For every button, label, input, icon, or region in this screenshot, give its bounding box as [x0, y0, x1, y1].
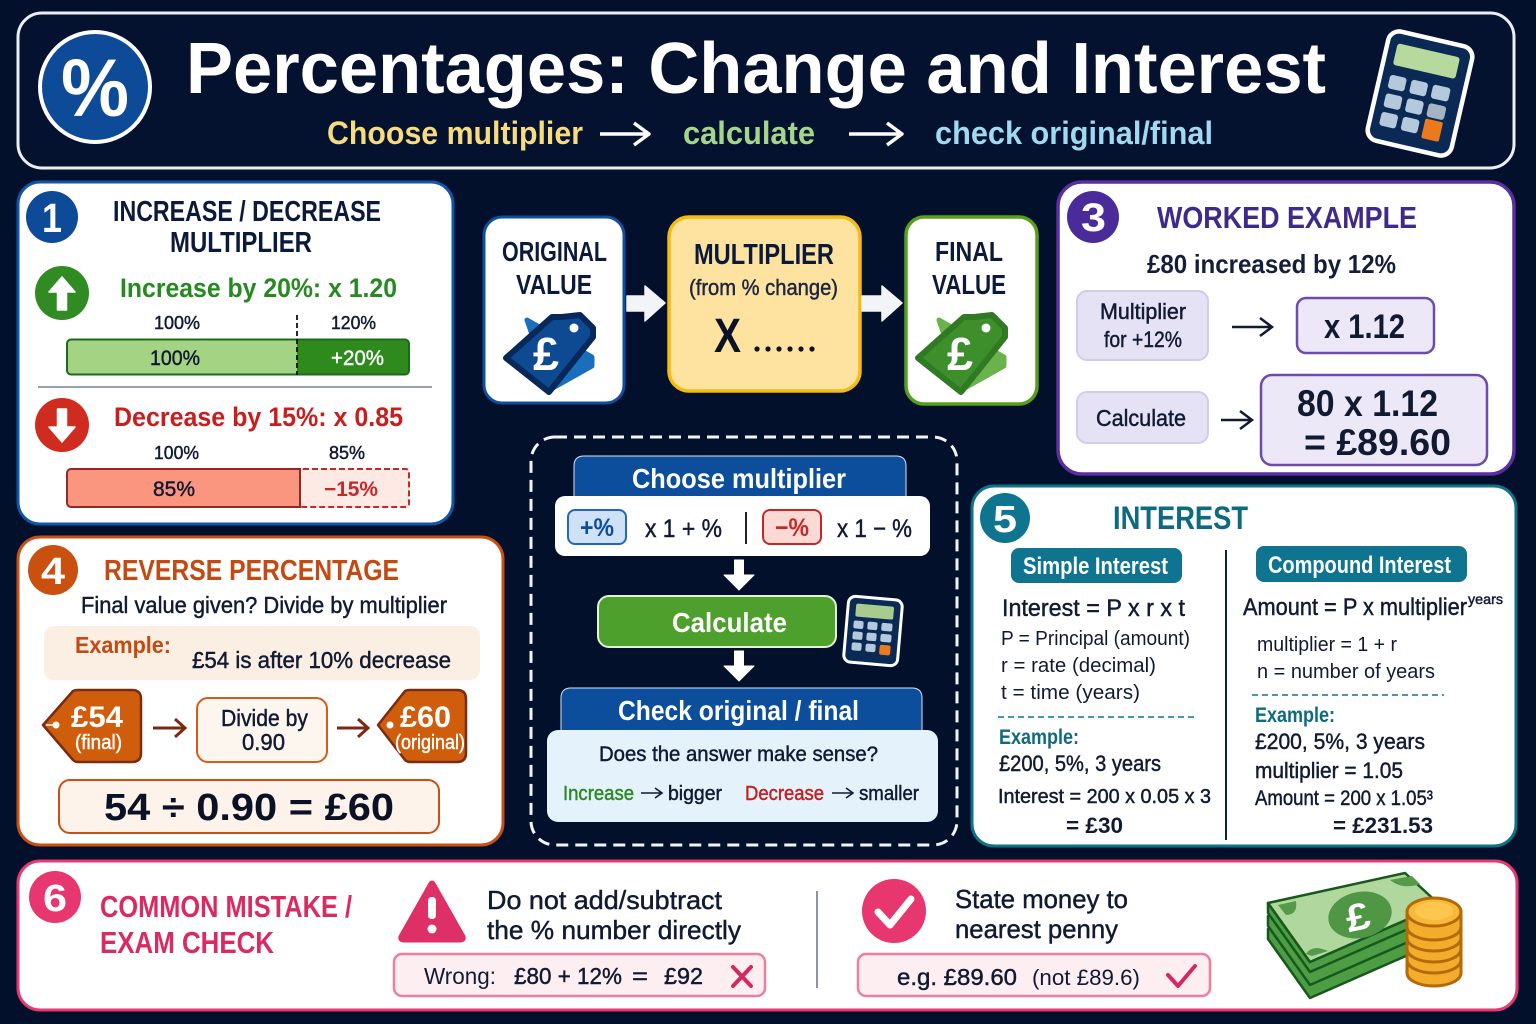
- subtitle flow: check original/final: [935, 115, 1213, 151]
- badge 6: 6: [43, 878, 67, 920]
- column: simple interest: Interest = P x r x t: [1002, 595, 1185, 622]
- column: compound interest: Example:: [1255, 704, 1335, 727]
- example callout: [44, 626, 480, 680]
- wrong example: [394, 954, 765, 996]
- flow box: multiplier: [669, 217, 860, 391]
- column: compound interest: = £231.53: [1333, 813, 1433, 838]
- icon: blue price tag: £: [533, 328, 559, 380]
- badge 1: [26, 191, 78, 243]
- icon: up arrow: [35, 266, 89, 320]
- badge 6: [29, 871, 81, 923]
- column: compound interest: years: [1468, 591, 1503, 607]
- exam check text: [955, 884, 1128, 944]
- correct example: [858, 954, 1210, 996]
- icon: green price tag: [918, 315, 1005, 392]
- step: multiplier label: Multiplier: [1100, 299, 1186, 324]
- step: calculate label: Calculate: [1096, 405, 1186, 431]
- problem statement: £80 increased by 12%: [1147, 249, 1396, 279]
- icon: down arrow: [35, 398, 89, 452]
- result: = £89.60: [1304, 422, 1451, 463]
- step header: check original / final: [561, 688, 922, 735]
- decrease bar chart: 100%: [154, 443, 199, 463]
- sense check box: Increase: [563, 783, 634, 805]
- wrong example: £92: [664, 963, 703, 989]
- column: compound interest: Amount = 200 x 1.05³: [1255, 787, 1433, 810]
- wrong example: =: [632, 963, 648, 989]
- step: divide: Divide by: [221, 705, 308, 731]
- equation: 54 ÷ 0.90 = £60: [104, 787, 394, 829]
- step: calculate: Calculate: [672, 607, 787, 638]
- panel 6 heading: [100, 889, 352, 960]
- result: [1261, 375, 1487, 465]
- tag: £54 final: [43, 690, 141, 762]
- flow box: multiplier: MULTIPLIER: [694, 239, 834, 271]
- step: multiplier label: [1077, 291, 1208, 360]
- increase bar chart: 100%: [150, 347, 200, 370]
- column: simple interest: Example:: [999, 726, 1079, 749]
- decrease bar chart: [67, 443, 409, 507]
- panel 4 subtitle: Final value given? Divide by multiplier: [81, 592, 447, 618]
- decrease bar chart: 85%: [329, 443, 365, 463]
- panel 4 heading: REVERSE PERCENTAGE: [104, 555, 399, 587]
- flow box: original value: ORIGINAL: [502, 236, 607, 267]
- result: 80 x 1.12: [1297, 383, 1438, 424]
- step header: choose multiplier: [574, 456, 906, 498]
- multiplier value: x 1.12: [1324, 308, 1405, 346]
- flow box: original value: [484, 217, 624, 403]
- sense check box: Decrease: [745, 783, 824, 805]
- column: simple interest: [998, 548, 1211, 838]
- increase bar chart: +20%: [331, 347, 384, 370]
- step header: check original / final: Check original / final: [618, 695, 859, 726]
- badge 3: 3: [1081, 196, 1106, 240]
- decrease rule: Decrease by 15%: x 0.85: [114, 402, 403, 432]
- equation: [59, 780, 439, 833]
- badge 1: 1: [42, 195, 62, 241]
- icon: banknotes and coins: [1268, 873, 1461, 998]
- panel 1 heading: MULTIPLIER: [170, 227, 312, 259]
- correct example: e.g. £89.60: [897, 964, 1017, 990]
- step header: choose multiplier: Choose multiplier: [632, 463, 846, 494]
- column: compound interest: £200, 5%, 3 years: [1255, 729, 1425, 754]
- column: simple interest: r = rate (decimal): [1001, 655, 1156, 677]
- icon: percent badge: %: [61, 43, 129, 134]
- column: compound interest: multiplier = 1.05: [1255, 758, 1403, 783]
- arrow down: [724, 560, 754, 590]
- arrow: [1221, 411, 1252, 429]
- panel 4: reverse percentage: [18, 537, 503, 845]
- mistake text: the % number directly: [487, 915, 741, 945]
- icon: warning triangle: [402, 884, 462, 939]
- title: Percentages: Change and Interest: [186, 29, 1326, 109]
- icon: percent badge: [40, 32, 150, 142]
- multiplier rules: x 1 − %: [837, 515, 912, 543]
- step: divide: [197, 698, 327, 762]
- increase bar chart: 120%: [331, 313, 376, 333]
- correct example: (not £89.6): [1032, 965, 1140, 990]
- multiplier rules: x 1 + %: [645, 515, 722, 543]
- panel: process flowchart: [531, 437, 957, 845]
- multiplier rules: +%: [580, 514, 614, 542]
- panel 5 heading: INTEREST: [1113, 500, 1248, 536]
- panel 1 heading: [113, 196, 381, 259]
- panel 3: worked example: [1058, 182, 1514, 474]
- icon: check circle: [862, 879, 926, 943]
- wrong example: Wrong:: [424, 963, 496, 989]
- step: calculate: [598, 596, 836, 647]
- multiplier rules: [555, 496, 930, 556]
- arrow down: [724, 651, 754, 681]
- mistake text: [487, 885, 741, 945]
- arrow: [337, 719, 368, 737]
- flow box: multiplier: X: [714, 310, 741, 363]
- flow box: final value: VALUE: [932, 269, 1006, 300]
- tag: £60 original: [378, 690, 466, 762]
- column: simple interest: Interest = 200 x 0.05 x 3: [998, 786, 1211, 808]
- arrow: [1232, 318, 1272, 336]
- increase rule: Increase by 20%: x 1.20: [120, 273, 397, 303]
- tag: £54 final: (final): [75, 732, 122, 754]
- column: compound interest: n = number of years: [1257, 661, 1435, 683]
- badge 5: 5: [993, 499, 1017, 541]
- panel 5: interest: [972, 486, 1516, 846]
- column: simple interest: P = Principal (amount): [1001, 628, 1190, 650]
- subtitle flow: calculate: [683, 115, 815, 151]
- arrow: original to multiplier: [627, 286, 665, 321]
- tag: £60 original: (original): [395, 732, 465, 754]
- arrow: [153, 719, 185, 737]
- column: simple interest: = £30: [1066, 813, 1123, 838]
- multiplier value: [1297, 298, 1434, 353]
- column: compound interest: Amount = P x multiplier: [1243, 594, 1467, 621]
- flow box: original value: VALUE: [516, 269, 592, 300]
- panel 3 heading: WORKED EXAMPLE: [1157, 200, 1417, 235]
- panel 1: increase / decrease multiplier: [18, 182, 453, 524]
- column: compound interest: multiplier = 1 + r: [1257, 634, 1397, 656]
- flow box: final value: [906, 217, 1037, 404]
- subtitle flow: [327, 115, 1213, 151]
- arrow: multiplier to final: [862, 286, 902, 321]
- sense check box: bigger: [668, 783, 722, 805]
- column: simple interest: t = time (years): [1001, 682, 1140, 704]
- step: multiplier label: for +12%: [1104, 327, 1182, 352]
- icon: blue price tag: [506, 315, 593, 392]
- tag: £54 final: £54: [71, 701, 123, 734]
- example callout: £54 is after 10% decrease: [192, 647, 451, 673]
- subtitle flow: Choose multiplier: [327, 115, 583, 151]
- column: simple interest: Simple Interest: [1023, 553, 1168, 580]
- wrong example: £80 + 12%: [514, 963, 622, 989]
- badge 4: [28, 545, 78, 595]
- example callout: Example:: [75, 632, 171, 658]
- panel 6: common mistake / exam check: [18, 861, 1517, 1010]
- sense check box: smaller: [859, 783, 919, 805]
- badge 3: [1067, 191, 1119, 243]
- increase bar chart: 100%: [154, 313, 200, 333]
- badge 4: 4: [41, 551, 65, 593]
- multiplier rules: −%: [775, 514, 809, 542]
- flow box: multiplier: (from % change): [689, 275, 838, 300]
- header banner: [18, 13, 1514, 168]
- icon: banknotes and coins: £: [1342, 895, 1374, 941]
- increase bar chart: [67, 313, 409, 375]
- step: calculate label: [1077, 392, 1208, 443]
- column: compound interest: [1243, 546, 1503, 838]
- tag: £60 original: £60: [400, 701, 451, 734]
- step: divide: 0.90: [242, 729, 285, 755]
- decrease bar chart: 85%: [153, 478, 195, 501]
- flow box: final value: FINAL: [935, 236, 1003, 267]
- panel 6 heading: EXAM CHECK: [100, 925, 275, 960]
- sense check box: [547, 730, 938, 822]
- exam check text: State money to: [955, 884, 1128, 914]
- panel 6 heading: COMMON MISTAKE /: [100, 889, 352, 924]
- sense check box: Does the answer make sense?: [599, 743, 878, 766]
- decrease bar chart: −15%: [324, 478, 378, 501]
- mistake text: Do not add/subtract: [487, 885, 723, 915]
- icon: green price tag: £: [947, 328, 973, 380]
- column: compound interest: Compound Interest: [1268, 552, 1451, 579]
- icon: small calculator: [843, 596, 903, 666]
- column: simple interest: £200, 5%, 3 years: [999, 751, 1161, 776]
- badge 5: [980, 493, 1030, 543]
- exam check text: nearest penny: [955, 914, 1118, 944]
- panel 1 heading: INCREASE / DECREASE: [113, 196, 381, 228]
- icon: calculator: [1366, 29, 1474, 158]
